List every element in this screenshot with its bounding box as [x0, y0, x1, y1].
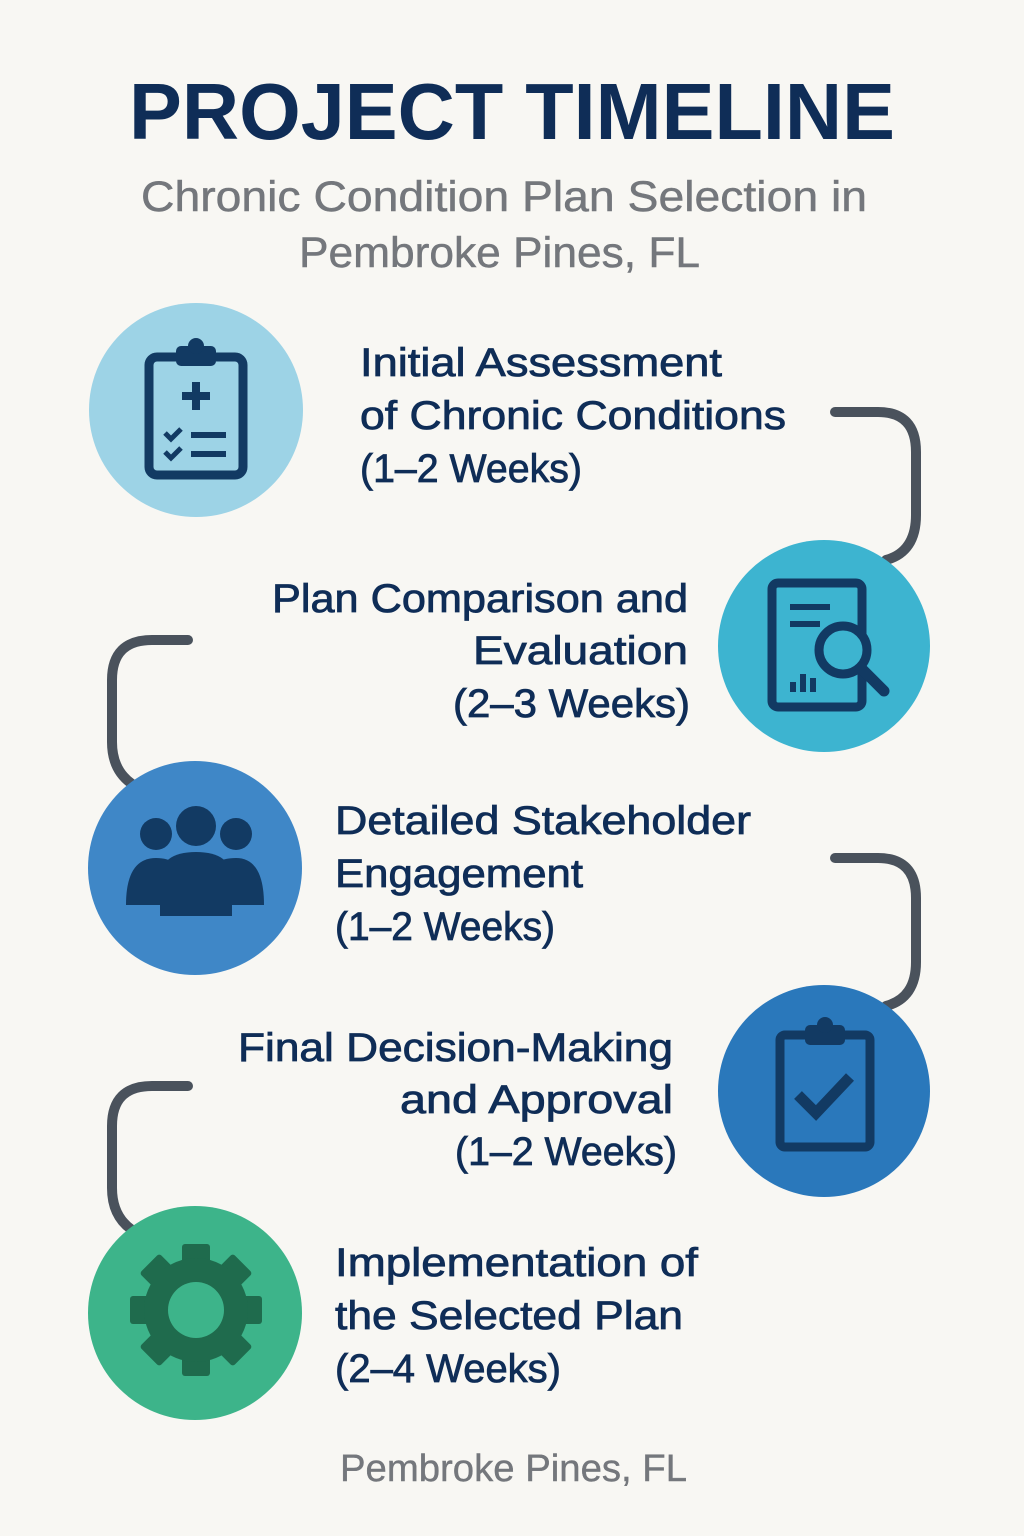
text: step 3: Engagement [335, 852, 583, 896]
connector 2 [112, 640, 188, 784]
text: step 2 [272, 577, 690, 726]
text: step 1 [360, 341, 786, 491]
text: step 3: (1–2 Weeks) [335, 905, 555, 949]
text: step 4: Final Decision-Making [238, 1026, 673, 1070]
text: step 1: Initial Assessment [360, 341, 722, 385]
title: PROJECT TIMELINE [129, 67, 895, 156]
step 2: plan comparison [272, 540, 930, 752]
text: step 3 [335, 799, 751, 949]
connector 1 [835, 412, 916, 560]
text: step 4 [238, 1026, 677, 1174]
text: step 4: and Approval [400, 1078, 673, 1122]
subtitle [141, 173, 867, 277]
connector 3 [835, 858, 916, 1006]
subtitle: Chronic Condition Plan Selection in [141, 173, 867, 221]
text: step 1: (1–2 Weeks) [360, 447, 582, 491]
text: step 5: (2–4 Weeks) [335, 1347, 561, 1391]
icon: document with magnifier [718, 540, 930, 752]
footer: Pembroke Pines, FL [340, 1448, 687, 1490]
icon: clipboard with check [718, 985, 930, 1197]
icon: group of people [88, 761, 302, 975]
subtitle: Pembroke Pines, FL [299, 229, 700, 277]
text: step 5: the Selected Plan [335, 1294, 683, 1338]
text: step 2: Plan Comparison and [272, 577, 688, 621]
icon: clipboard with plus [89, 303, 303, 517]
text: step 1: of Chronic Conditions [360, 394, 786, 438]
text: step 4: (1–2 Weeks) [455, 1130, 677, 1174]
text: step 5: Implementation of [335, 1241, 699, 1285]
text: step 3: Detailed Stakeholder [335, 799, 751, 843]
text: step 2: (2–3 Weeks) [453, 682, 690, 726]
icon: gear [88, 1206, 302, 1420]
step 5: implementation [88, 1206, 699, 1420]
step 1: initial assessment [89, 303, 786, 517]
connector 4 [112, 1086, 188, 1230]
text: step 2: Evaluation [473, 629, 688, 673]
text: step 5 [335, 1241, 699, 1391]
step 3: stakeholder engagement [88, 761, 751, 975]
step 4: final decision [238, 985, 930, 1197]
